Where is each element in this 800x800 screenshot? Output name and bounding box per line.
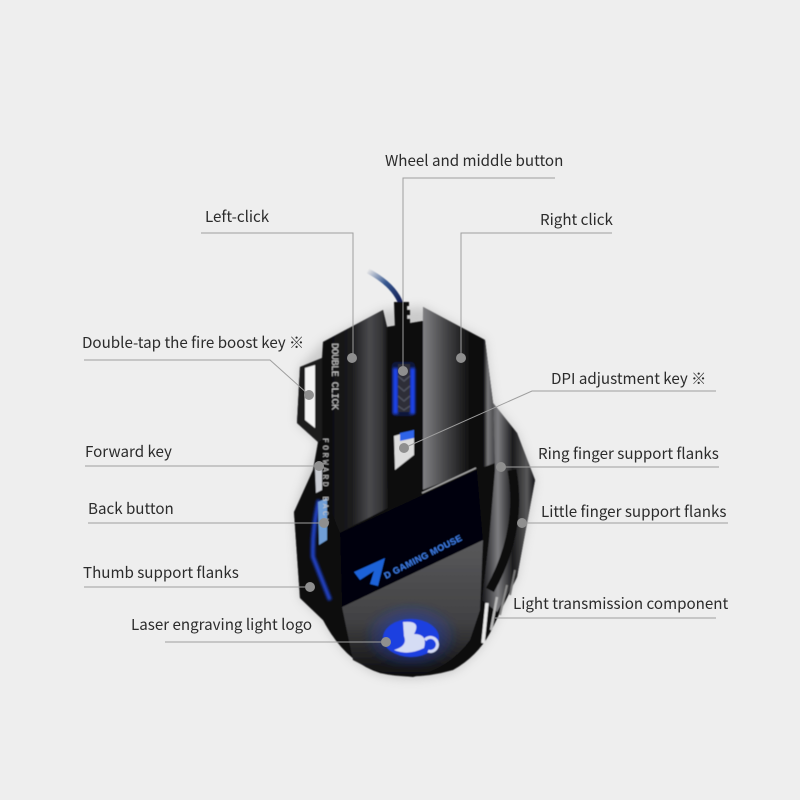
- callout: forward key: [85, 440, 324, 471]
- centre channel: [387, 321, 423, 508]
- callout: wheel and middle button: [385, 149, 563, 376]
- light logo: dragon: [363, 602, 459, 670]
- callout: back button: [88, 497, 329, 528]
- mouse shadow: [294, 307, 535, 679]
- callout: fire boost key: Double-tap the fire boost key ※: [82, 331, 304, 353]
- callout: left-click: Left-click: [205, 205, 270, 227]
- callout: left-click: [201, 205, 357, 363]
- callout: little finger flanks: [517, 500, 728, 528]
- forward and back keys: [315, 465, 327, 545]
- callout: ring finger flanks: Ring finger support flanks: [538, 442, 719, 464]
- callout: fire boost key: [82, 331, 314, 400]
- callout: right click: [456, 208, 614, 363]
- callout: back button: Back button: [88, 497, 174, 519]
- mouse illustration: [294, 271, 535, 677]
- printed logo: 7D gaming mouse: D GAMING MOUSE: [382, 533, 464, 581]
- printed label: forward back: FORWARD BACK: [320, 438, 329, 523]
- callout: laser engraving light logo: [131, 613, 391, 647]
- callout: thumb support flanks: [83, 561, 315, 592]
- glossy black band: [340, 470, 483, 607]
- callout: little finger flanks: Little finger support flanks: [541, 500, 726, 522]
- wheel: [392, 362, 415, 416]
- callout: laser engraving light logo: Laser engraving light logo: [131, 613, 312, 635]
- mouse body: [294, 307, 535, 676]
- right button: [422, 307, 495, 490]
- left button: [322, 310, 388, 535]
- DPI key: [394, 430, 414, 470]
- callout: light transmission component: Light transmission component: [513, 592, 729, 614]
- palm rest: [342, 540, 483, 677]
- callout: DPI adjustment key: [399, 367, 716, 453]
- callout: wheel and middle button: Wheel and middle button: [385, 149, 563, 171]
- printed label: double click: DOUBLE CLICK: [328, 343, 339, 410]
- fire boost key: [297, 358, 322, 442]
- callout: DPI adjustment key: DPI adjustment key ※: [551, 367, 706, 389]
- callout: ring finger flanks: [496, 442, 719, 472]
- callout: thumb support flanks: Thumb support flanks: [83, 561, 239, 583]
- side grip: [294, 476, 345, 640]
- light transmission slats: [483, 570, 515, 643]
- callout: right click: Right click: [540, 208, 614, 230]
- ring finger and little finger flanks: [482, 403, 535, 612]
- printed logo: 7D gaming mouse: [354, 533, 464, 586]
- mouse cable: [368, 271, 410, 330]
- callout: forward key: Forward key: [85, 440, 172, 462]
